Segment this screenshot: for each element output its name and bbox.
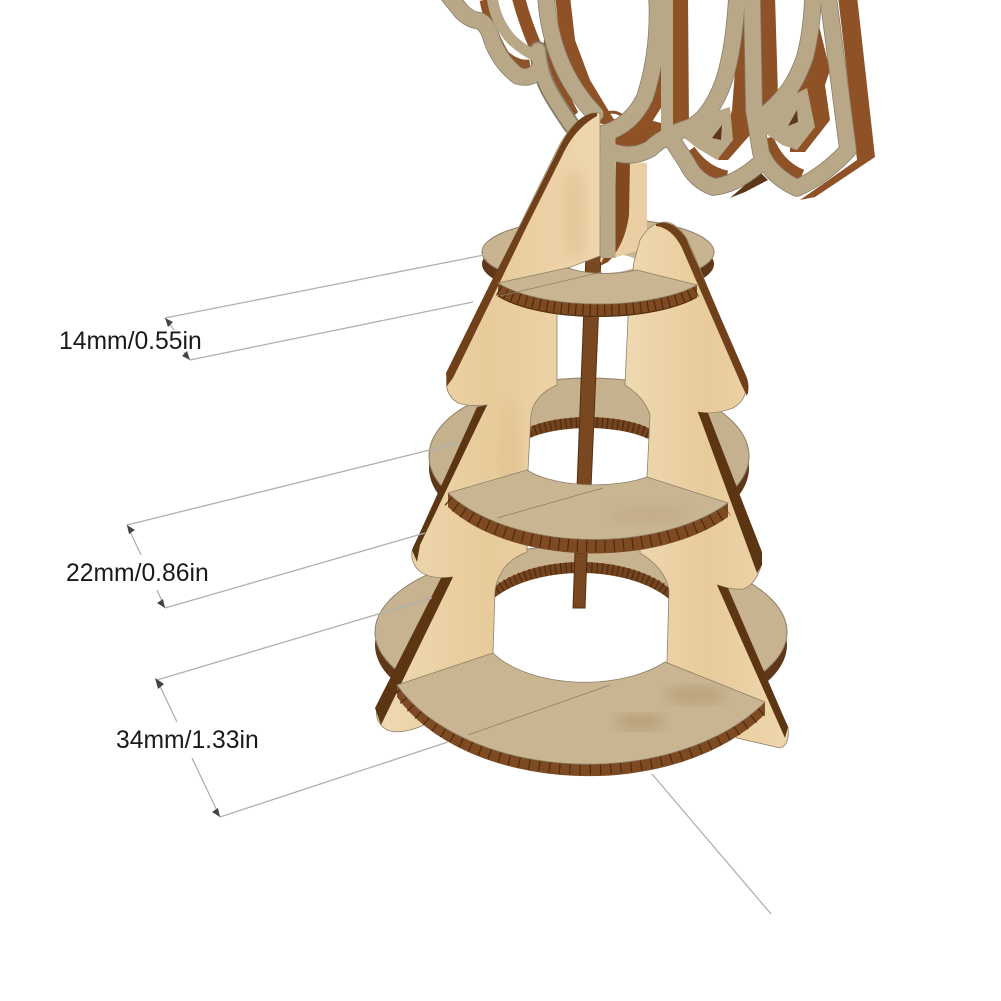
dimension: 14mm: [165, 255, 602, 360]
label: 14mm: 14mm/0.55in: [59, 328, 202, 355]
label: 34mm: 34mm/1.33in: [116, 727, 259, 754]
center slab: [600, 160, 647, 266]
front shelf: middle tier: [448, 470, 728, 553]
dimension: 34mm: [155, 598, 610, 817]
calligraphy brown depth: [542, 0, 875, 200]
arrowheads: [155, 678, 220, 817]
wood grain tint: [563, 170, 587, 260]
back disc: middle tier: [429, 378, 749, 546]
leader line: [652, 774, 771, 914]
calligraphy bulbs: [683, 88, 815, 160]
dimension: 22mm: [127, 443, 603, 608]
back disc: bottom tier: [375, 546, 787, 731]
calligraphy tan face: [449, 0, 848, 258]
left tree panel: [375, 113, 600, 732]
arrowheads: [127, 525, 165, 608]
label: 22mm: 22mm/0.86in: [66, 560, 209, 587]
front shelf: bottom tier: [397, 653, 765, 776]
back disc: top tier: [482, 218, 714, 298]
right panel brown edge: [656, 223, 788, 738]
arrowheads: [165, 318, 190, 360]
calligraphy grey outline: [449, 0, 848, 188]
front shelf: top tier: [498, 268, 697, 316]
right tree panel: [625, 222, 788, 748]
calligraphy topper: [449, 0, 875, 258]
central pole: [573, 255, 601, 608]
left panel brown edge: [375, 113, 597, 725]
